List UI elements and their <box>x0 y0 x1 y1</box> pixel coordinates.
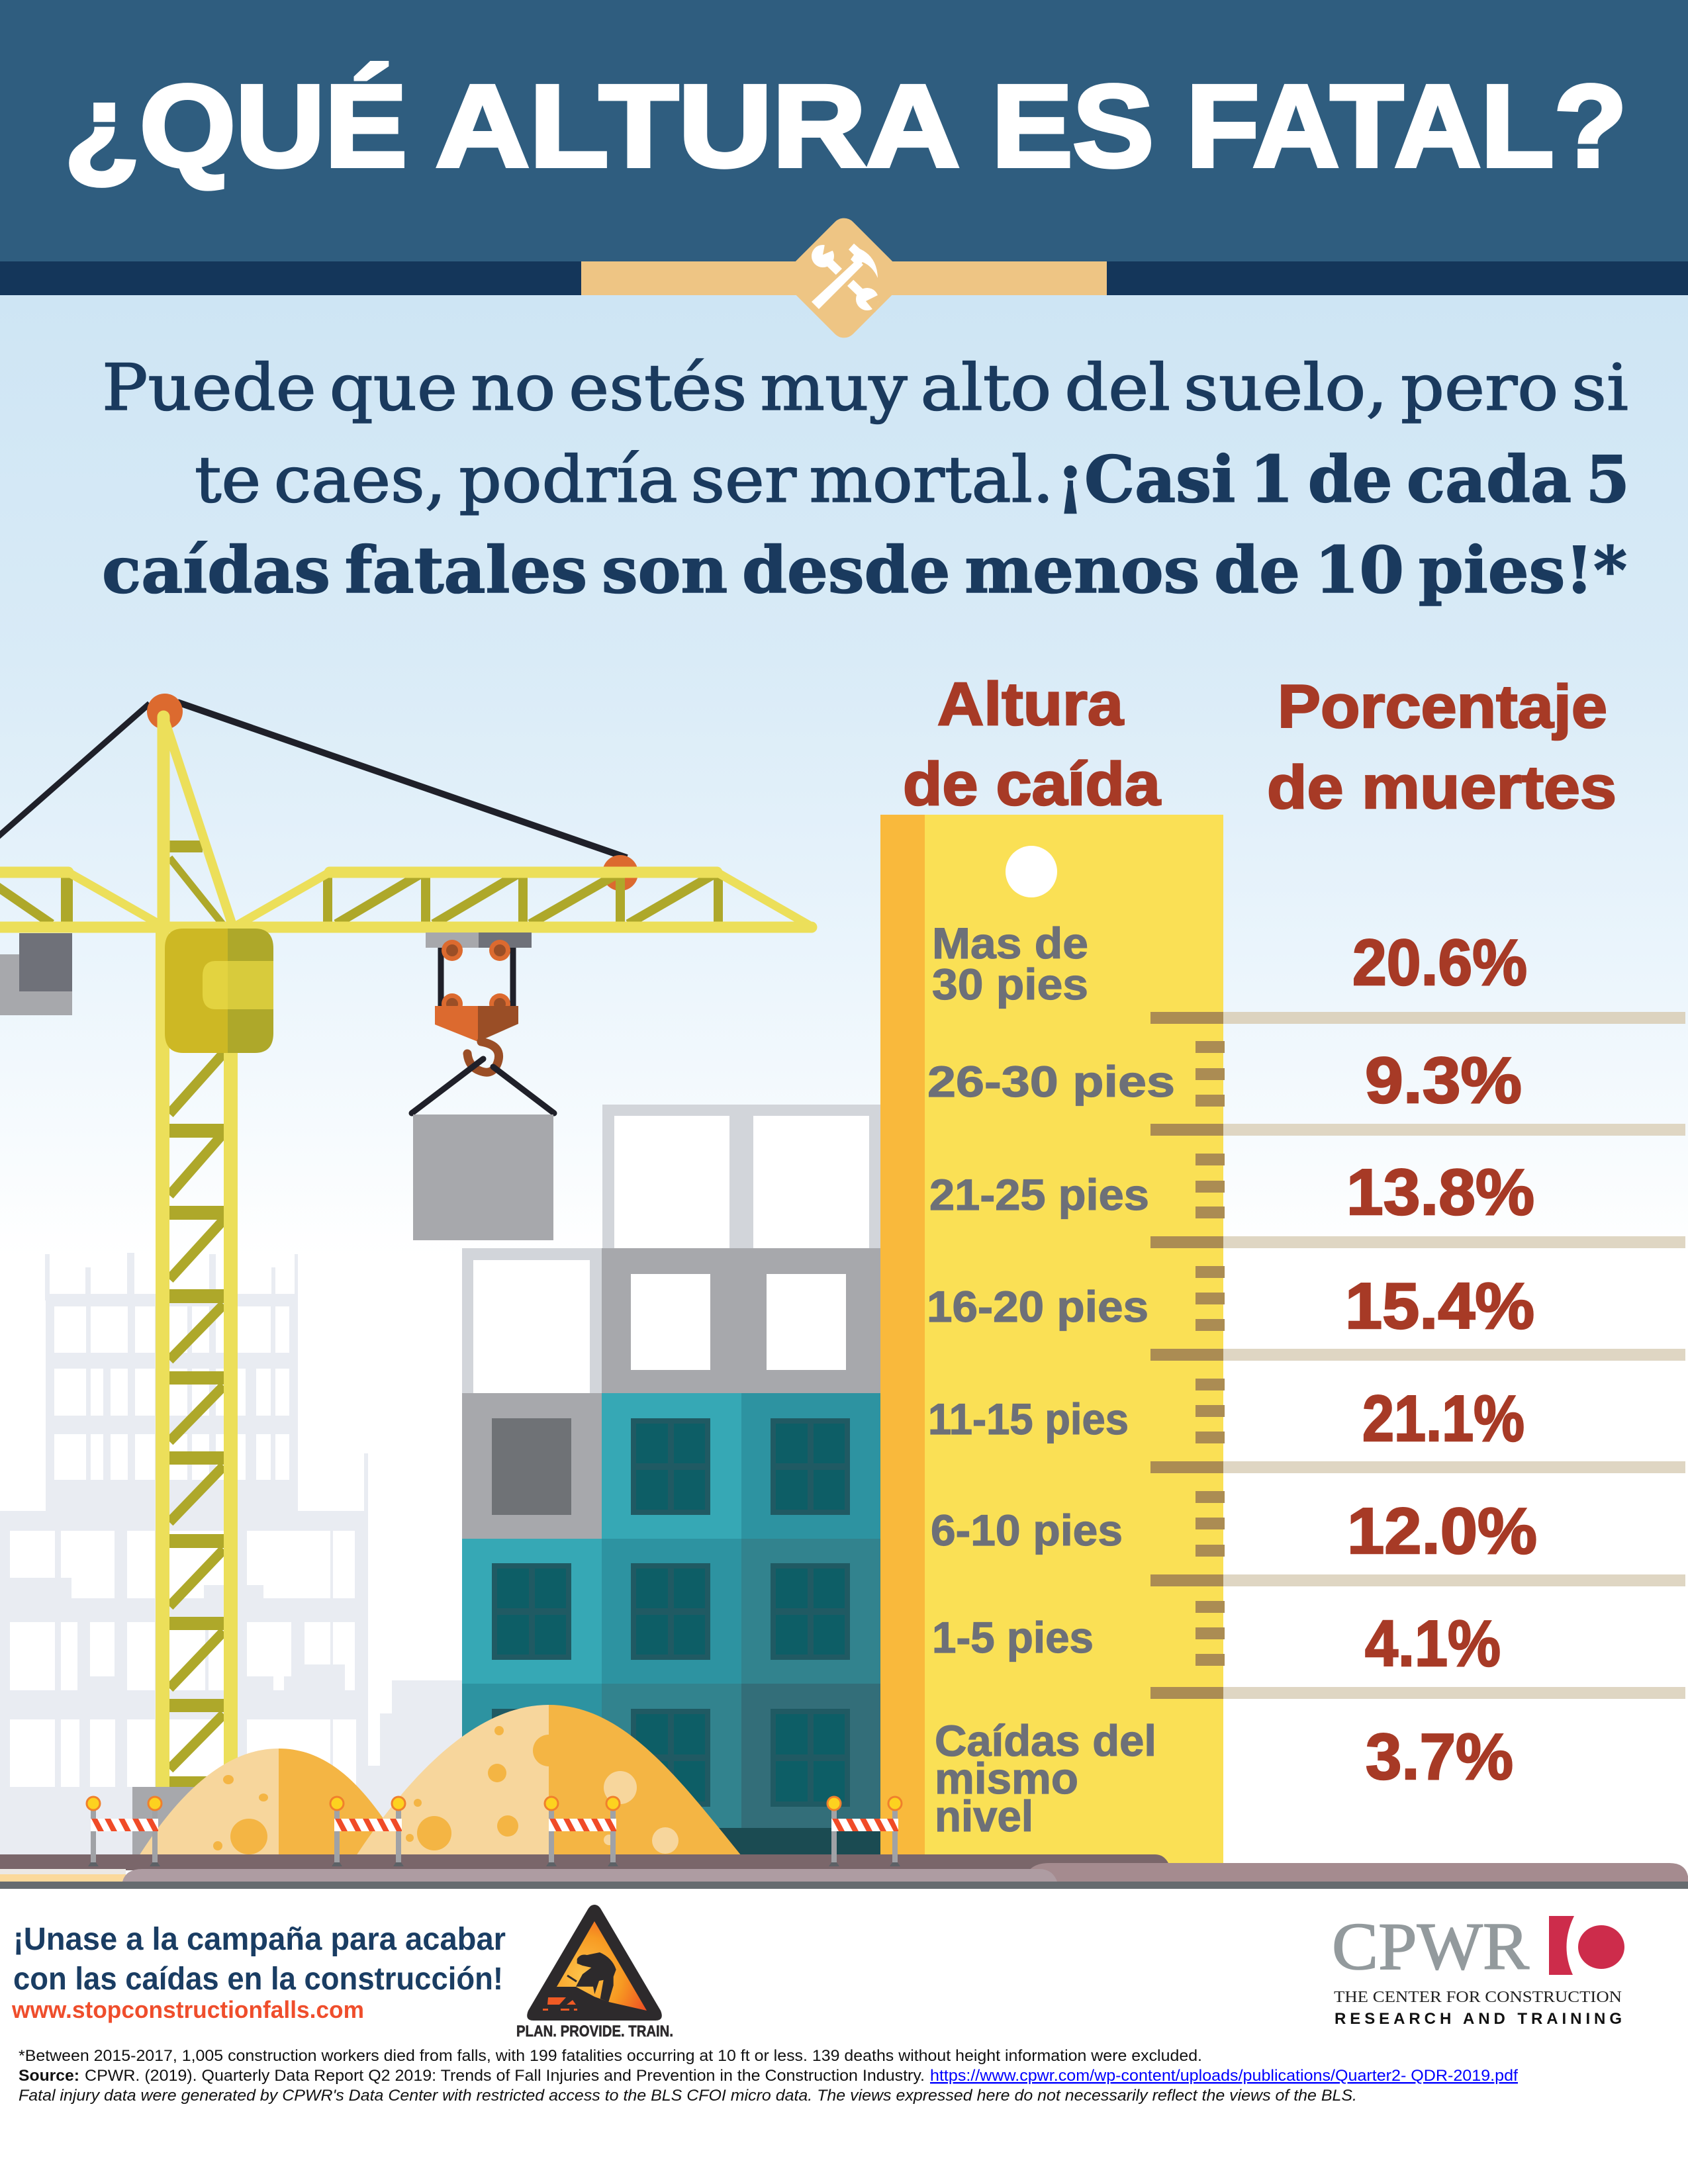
title: ¿QUÉ <box>64 62 407 191</box>
wrench <box>812 241 880 312</box>
ruler hole <box>1006 846 1057 897</box>
campaign call to action <box>11 1922 506 2023</box>
footnotes and source: Source: <box>19 2067 79 2085</box>
height labels: 6-10 pies <box>931 1506 1123 1555</box>
counterweight <box>0 933 72 1015</box>
height labels: 21-25 pies <box>929 1170 1149 1219</box>
footnotes and source <box>19 2047 1518 2105</box>
height labels: 11-15 pies <box>928 1394 1129 1443</box>
percentages: 15.4% <box>1345 1269 1534 1342</box>
jib chords <box>0 717 812 927</box>
building under construction <box>462 1105 881 1856</box>
intro text: Puede que no estés muy alto del suelo, pero si <box>102 351 1628 425</box>
ground <box>0 1854 1688 1889</box>
intro text <box>102 351 1630 608</box>
mast legs <box>156 927 238 1788</box>
intro text: ¡Casi 1 de cada 5 <box>1056 442 1630 517</box>
crane cables and pivots <box>0 694 638 891</box>
right sand pile <box>356 1705 741 1856</box>
height labels: nivel <box>935 1792 1033 1841</box>
height labels: 16-20 pies <box>927 1282 1149 1331</box>
percentages: 21.1% <box>1362 1382 1524 1455</box>
left sand pile <box>139 1749 405 1856</box>
tower crane <box>0 694 812 1856</box>
height labels: Mas de <box>932 919 1088 968</box>
campaign call to action: ¡Unase a la campaña para acabar <box>13 1922 506 1957</box>
height labels <box>927 919 1175 1841</box>
CPWR logo: RESEARCH AND TRAINING <box>1335 2010 1622 2028</box>
height labels: Caídas del <box>935 1716 1156 1765</box>
column heading: percentage: de muertes <box>1267 754 1617 821</box>
column heading: percentage: Porcentaje <box>1278 673 1607 741</box>
top floor frame <box>602 1105 881 1250</box>
title: ALTURA <box>436 62 960 191</box>
barrier 3 <box>545 1797 620 1866</box>
roof <box>543 1987 647 2013</box>
title <box>64 62 1627 191</box>
jib truss <box>0 846 718 924</box>
footnotes and source: Fatal injury data were generated by CPWR's Data Center with restricted access to the BLS CFOI micro data. The views expressed here do not necessarily reflect the views of the BLS. <box>19 2087 1357 2105</box>
percentages: 12.0% <box>1347 1494 1537 1567</box>
campaign logo: warning triangle with worker: PLAN. PROVIDE. TRAIN. <box>516 2023 673 2040</box>
footnotes and source: https://www.cpwr.com/wp-content/uploads/publications/Quarter2- QDR-2019.pdf <box>930 2067 1518 2085</box>
campaign call to action: www.stopconstructionfalls.com <box>11 1996 364 2023</box>
sand piles <box>139 1705 741 1856</box>
title: ES <box>992 62 1154 191</box>
background ghost buildings <box>0 1253 463 1856</box>
percentages: 13.8% <box>1346 1156 1534 1228</box>
campaign call to action: con las caídas en la construcción! <box>13 1962 503 1997</box>
barrier 4 <box>827 1797 902 1866</box>
height labels: 30 pies <box>932 960 1088 1009</box>
percentages <box>1345 926 1537 1793</box>
height labels: 1-5 pies <box>932 1613 1094 1662</box>
footnotes and source: CPWR. (2019). Quarterly Data Report Q2 2019: Trends of Fall Injuries and Prevention in the Construction Industry. <box>85 2067 925 2085</box>
crane cab <box>165 929 273 1053</box>
percentages: 20.6% <box>1352 926 1527 999</box>
crane base <box>132 1787 194 1856</box>
mast truss <box>169 1053 224 1769</box>
CPWR logo <box>1332 1909 1624 2028</box>
intro text: te caes, podría ser mortal. <box>195 443 1054 517</box>
windows <box>492 1418 850 1807</box>
ruler short ticks <box>1196 1041 1225 1666</box>
column heading: height: Altura <box>937 670 1124 738</box>
worker silhouette <box>576 1952 616 2002</box>
ruler long ticks <box>1150 1012 1223 1699</box>
campaign logo: warning triangle with worker <box>516 1905 673 2040</box>
icon: crossed hammer and wrench badge <box>779 213 909 343</box>
percentages: 4.1% <box>1365 1607 1501 1680</box>
road barriers <box>87 1797 902 1866</box>
height labels: 26-30 pies <box>927 1057 1175 1106</box>
height labels: mismo <box>935 1754 1078 1803</box>
CPWR logo: CPWR <box>1332 1909 1529 1984</box>
CPWR logo: THE CENTER FOR CONSTRUCTION <box>1334 1989 1622 2006</box>
concrete floor <box>462 1248 881 1393</box>
roof highlights <box>543 1997 577 2011</box>
footnotes and source: *Between 2015-2017, 1,005 construction workers died from falls, with 199 fatalities occurring at 10 ft or less. 139 deaths without height information were excluded. <box>19 2047 1202 2065</box>
column heading: percentage <box>1267 673 1617 821</box>
column heading: height <box>903 670 1161 818</box>
title: FATAL? <box>1186 62 1627 191</box>
ruler <box>880 815 1225 1867</box>
hammer <box>812 244 878 309</box>
barrier 1 <box>87 1797 162 1866</box>
hook and hanging concrete block <box>412 933 554 1240</box>
column heading: height: de caída <box>903 751 1161 818</box>
worker hammer <box>567 1976 577 1981</box>
barrier 2 <box>330 1797 405 1866</box>
intro text: caídas fatales son desde menos de 10 pies!* <box>102 533 1627 608</box>
percentages: 3.7% <box>1366 1720 1513 1793</box>
table row dividers <box>1223 1012 1685 1699</box>
percentages: 9.3% <box>1365 1044 1522 1116</box>
teal floors <box>462 1393 881 1856</box>
header banner <box>0 0 1688 295</box>
